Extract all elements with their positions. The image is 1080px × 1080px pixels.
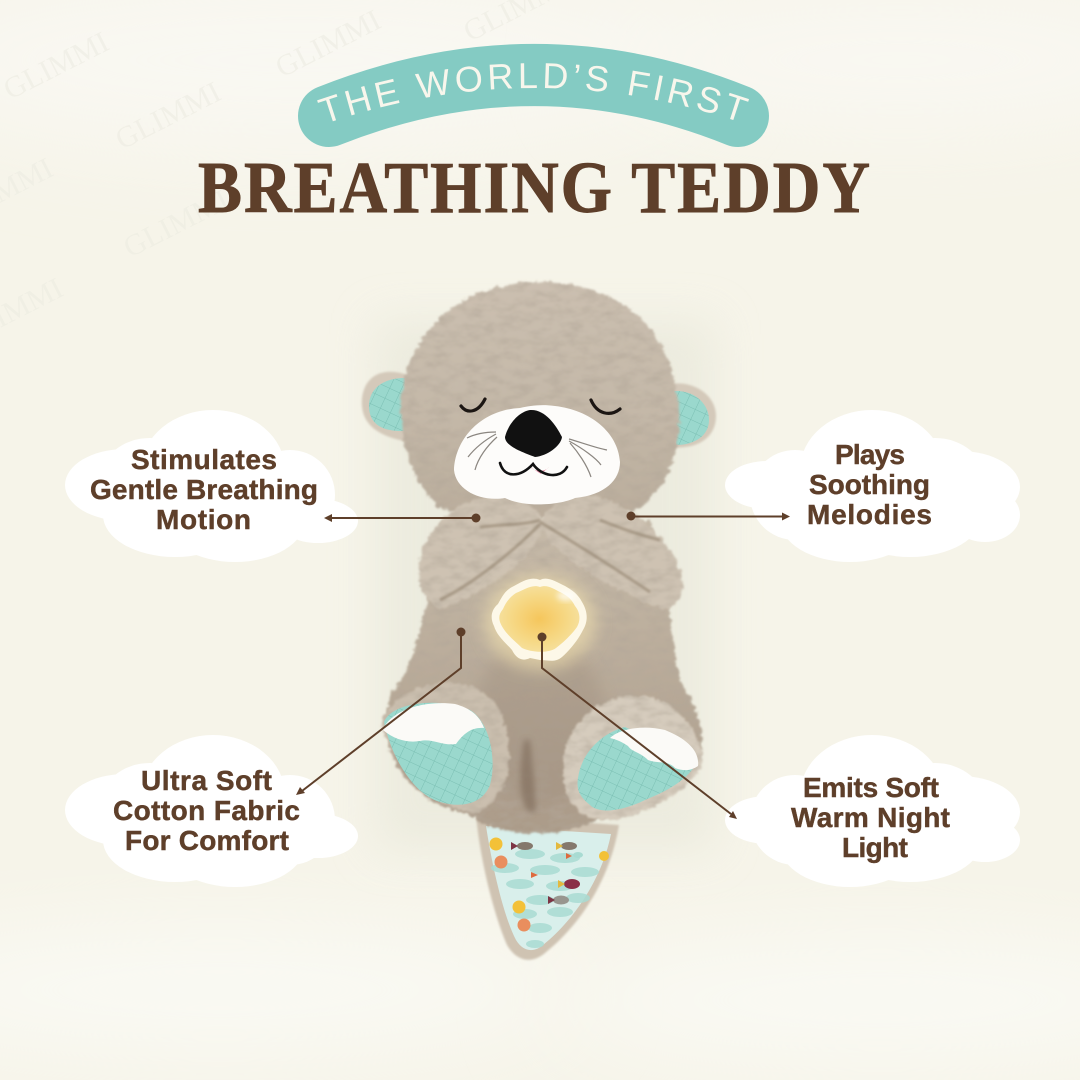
text: night light	[791, 772, 950, 863]
muzzle	[454, 405, 620, 504]
right arm	[540, 494, 682, 608]
right foot white tip	[610, 728, 698, 770]
right leg and foot	[563, 696, 702, 820]
text: ultra soft: Cotton Fabric	[113, 795, 300, 826]
belly fur shading	[475, 635, 605, 812]
text: ultra soft: Ultra Soft	[141, 765, 272, 796]
watermark: GLIMMI	[0, 25, 114, 106]
body	[385, 520, 702, 833]
watermark	[0, 0, 574, 334]
otter plush	[362, 282, 716, 960]
left foot white tip	[383, 703, 484, 744]
watermark: GLIMMI	[110, 75, 226, 156]
nose	[505, 410, 562, 457]
text: stimulates	[90, 444, 318, 535]
whiskers	[467, 432, 607, 477]
arrow: melodies	[626, 512, 790, 520]
cloud: night light	[725, 735, 1020, 887]
text: ultra soft	[113, 765, 300, 856]
tail blanket	[476, 815, 619, 960]
left ear	[362, 372, 410, 442]
banner text: THE WORLD’S FIRST	[317, 63, 749, 122]
text: stimulates: Gentle Breathing	[90, 474, 318, 505]
eyes	[461, 399, 620, 413]
text: night light: Emits Soft	[803, 772, 939, 803]
arrow: cotton fabric	[296, 628, 466, 795]
arm folds	[440, 520, 660, 600]
text: plays melodies: Melodies	[807, 499, 932, 530]
cloud: stimulates	[65, 410, 358, 562]
text: ultra soft: For Comfort	[125, 825, 289, 856]
text: plays melodies: Plays	[835, 439, 905, 470]
right ear	[670, 383, 716, 447]
title: BREATHING TEDDY	[198, 148, 870, 229]
text: night light: Warm Night	[791, 802, 950, 833]
fish	[490, 838, 609, 932]
text: plays melodies	[807, 439, 932, 530]
text: plays melodies: Soothing	[809, 469, 930, 500]
left arm	[419, 497, 544, 608]
cloud: plays melodies	[725, 410, 1020, 562]
head	[401, 282, 679, 518]
watermark: GLIMMI	[118, 183, 234, 264]
text: night light: Light	[842, 832, 908, 863]
mouth	[500, 463, 567, 475]
left leg and foot	[380, 683, 509, 812]
watermark: GLIMMI	[270, 3, 386, 84]
text: stimulates: Stimulates	[131, 444, 277, 475]
banner: the world's first	[298, 44, 769, 147]
glowing shell	[484, 574, 596, 670]
arrow: night light	[538, 632, 737, 819]
cloud: ultra soft	[65, 735, 358, 887]
text: stimulates: Motion	[156, 504, 251, 535]
arrow: breathing motion	[324, 514, 480, 522]
